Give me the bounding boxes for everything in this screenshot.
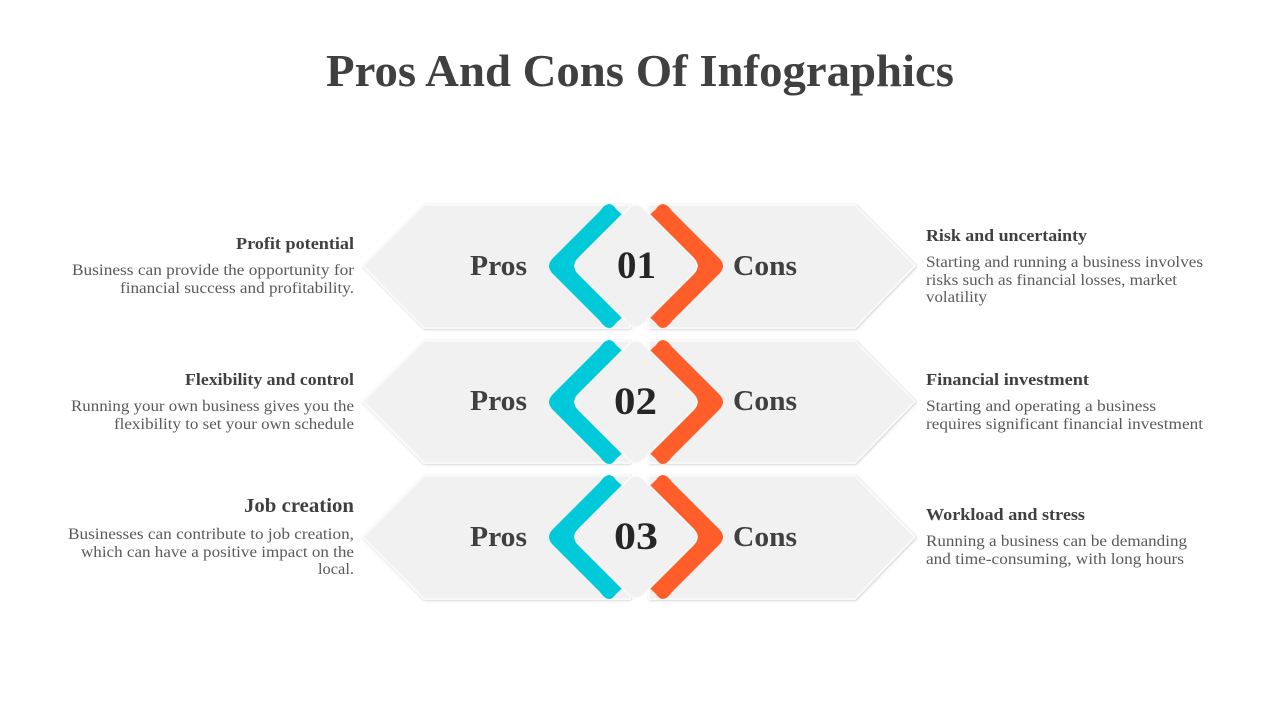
text block: profit potential: Business can provide the opportunity for bbox=[72, 262, 355, 279]
text block: financial investment: Financial investment bbox=[926, 370, 1090, 389]
text block: profit potential bbox=[72, 234, 355, 297]
icon: cyan chevron 03 bbox=[549, 475, 630, 599]
row 2: pros and cons diagram bbox=[363, 340, 915, 464]
panel: cons 01 bbox=[649, 205, 915, 328]
text block: financial investment bbox=[926, 370, 1204, 433]
number 01: 01 bbox=[617, 244, 656, 287]
text block: flexibility and control bbox=[71, 370, 354, 433]
panel: pros 03 bbox=[363, 476, 630, 599]
text block: job creation: Job creation bbox=[244, 496, 354, 517]
text block: job creation: which can have a positive impact on the bbox=[81, 544, 354, 561]
text block: risk and uncertainty: Starting and running a business involves bbox=[926, 254, 1203, 271]
label: pros 02: Pros bbox=[470, 385, 527, 417]
text block: job creation bbox=[68, 496, 354, 578]
center diamond 02 bbox=[575, 341, 697, 463]
label: cons 01: Cons bbox=[733, 250, 797, 282]
label: pros 01: Pros bbox=[470, 250, 527, 282]
text block: workload and stress: Workload and stress bbox=[926, 505, 1086, 524]
icon: cyan chevron 01 bbox=[549, 204, 630, 328]
label: cons 03: Cons bbox=[733, 521, 797, 553]
text block: workload and stress: Running a business can be demanding bbox=[926, 533, 1187, 550]
panel: pros 01 bbox=[363, 205, 630, 328]
text block: risk and uncertainty: risks such as financial losses, market bbox=[926, 272, 1178, 289]
label: pros 03: Pros bbox=[470, 521, 527, 553]
text block: profit potential: financial success and profitability. bbox=[120, 280, 354, 297]
text block: risk and uncertainty: Risk and uncertainty bbox=[926, 226, 1088, 245]
label: cons 02: Cons bbox=[733, 385, 797, 417]
center diamond 01 bbox=[575, 205, 697, 327]
panel: cons 02 bbox=[649, 341, 915, 463]
text block: flexibility and control: flexibility to set your own schedule bbox=[114, 416, 354, 433]
text block: risk and uncertainty: volatility bbox=[926, 289, 987, 306]
text block: flexibility and control: Running your own business gives you the bbox=[71, 398, 354, 415]
text block: workload and stress: and time-consuming, with long hours bbox=[926, 551, 1184, 568]
icon: orange chevron 01 bbox=[642, 204, 723, 328]
row 1: pros and cons diagram bbox=[363, 204, 915, 328]
row 3: pros and cons diagram bbox=[363, 475, 915, 599]
text block: flexibility and control: Flexibility and control bbox=[185, 370, 354, 389]
panel: pros 02 bbox=[363, 341, 630, 463]
text block: risk and uncertainty bbox=[926, 226, 1203, 306]
panel: cons 03 bbox=[649, 476, 915, 599]
icon: orange chevron 02 bbox=[642, 340, 723, 464]
text block: financial investment: Starting and operating a business bbox=[926, 398, 1156, 415]
center diamond 03 bbox=[575, 476, 697, 598]
text block: financial investment: requires significant financial investment bbox=[926, 416, 1204, 433]
text block: workload and stress bbox=[926, 505, 1187, 568]
icon: orange chevron 03 bbox=[642, 475, 723, 599]
text block: job creation: local. bbox=[318, 561, 354, 578]
text block: job creation: Businesses can contribute to job creation, bbox=[68, 526, 354, 543]
icon: cyan chevron 02 bbox=[549, 340, 630, 464]
number 03: 03 bbox=[614, 515, 658, 558]
number 02: 02 bbox=[614, 380, 657, 423]
text block: profit potential: Profit potential bbox=[236, 234, 354, 253]
title: Pros And Cons Of Infographics bbox=[326, 45, 954, 96]
